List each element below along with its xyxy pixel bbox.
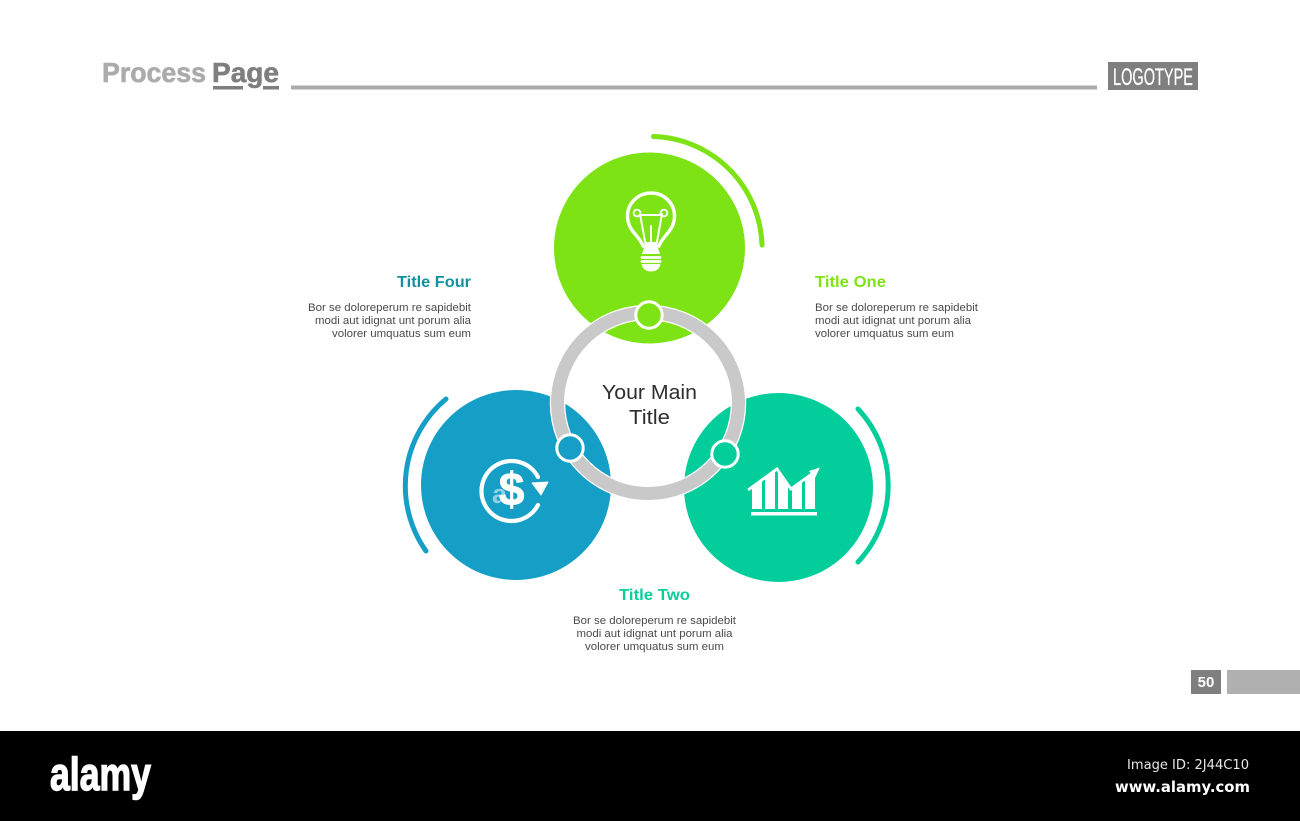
text block: Title Four: volorer umquatus sum eum [332,328,471,340]
page number [1191,670,1300,694]
panel: green circle with bulb [554,136,762,344]
title: Process Page: Process [102,57,206,88]
text block: Title Two: volorer umquatus sum eum [585,641,724,653]
main title [602,382,697,429]
header [102,57,1198,91]
text block: Title Four: Title Four [397,274,471,291]
text block: Title Four: Bor se doloreperum re sapidebit [308,302,472,314]
icon: dollar with circular arrow: a [492,479,508,509]
text block: Title Two: Title Two [619,587,690,604]
text block: Title Two: Bor se doloreperum re sapidebit [573,615,737,627]
panel: blue circle with dollar icon [405,390,611,580]
text block: Title Two [573,587,737,653]
footer logo: alamy: alamy [50,748,151,800]
text block: Title Four: modi aut idignat unt porum alia [315,315,472,327]
central ring [557,302,738,494]
panel: teal circle with chart icon [684,393,888,582]
logotype badge [1108,62,1198,91]
ring node: blue [557,435,583,461]
footer band [0,731,1300,821]
page number: 50 [1198,674,1214,691]
icon: light bulb [628,193,674,272]
text block: Title Four [308,274,472,340]
ring node: teal [712,441,738,467]
main title: Your Main [602,382,697,404]
logotype badge: LOGOTYPE [1113,64,1193,91]
title: Process Page: Page [212,57,279,88]
text block: Title One: Title One [815,274,886,291]
text block: Title One [815,274,979,340]
ring node: green [636,302,662,328]
text block: Title Two: modi aut idignat unt porum alia [576,628,733,640]
text block: Title One: volorer umquatus sum eum [815,328,954,340]
footer url: www.alamy.com [1115,778,1250,796]
text block: Title One: Bor se doloreperum re sapidebit [815,302,979,314]
main title: Title [629,407,670,429]
icon: dollar with circular arrow: $ [499,463,524,515]
icon: growth chart [748,468,820,516]
icon: dollar with circular arrow [481,461,548,521]
footer image id: Image ID: 2J44C10 [1127,757,1249,773]
title: Process Page [102,57,279,90]
text block: Title One: modi aut idignat unt porum alia [815,315,972,327]
